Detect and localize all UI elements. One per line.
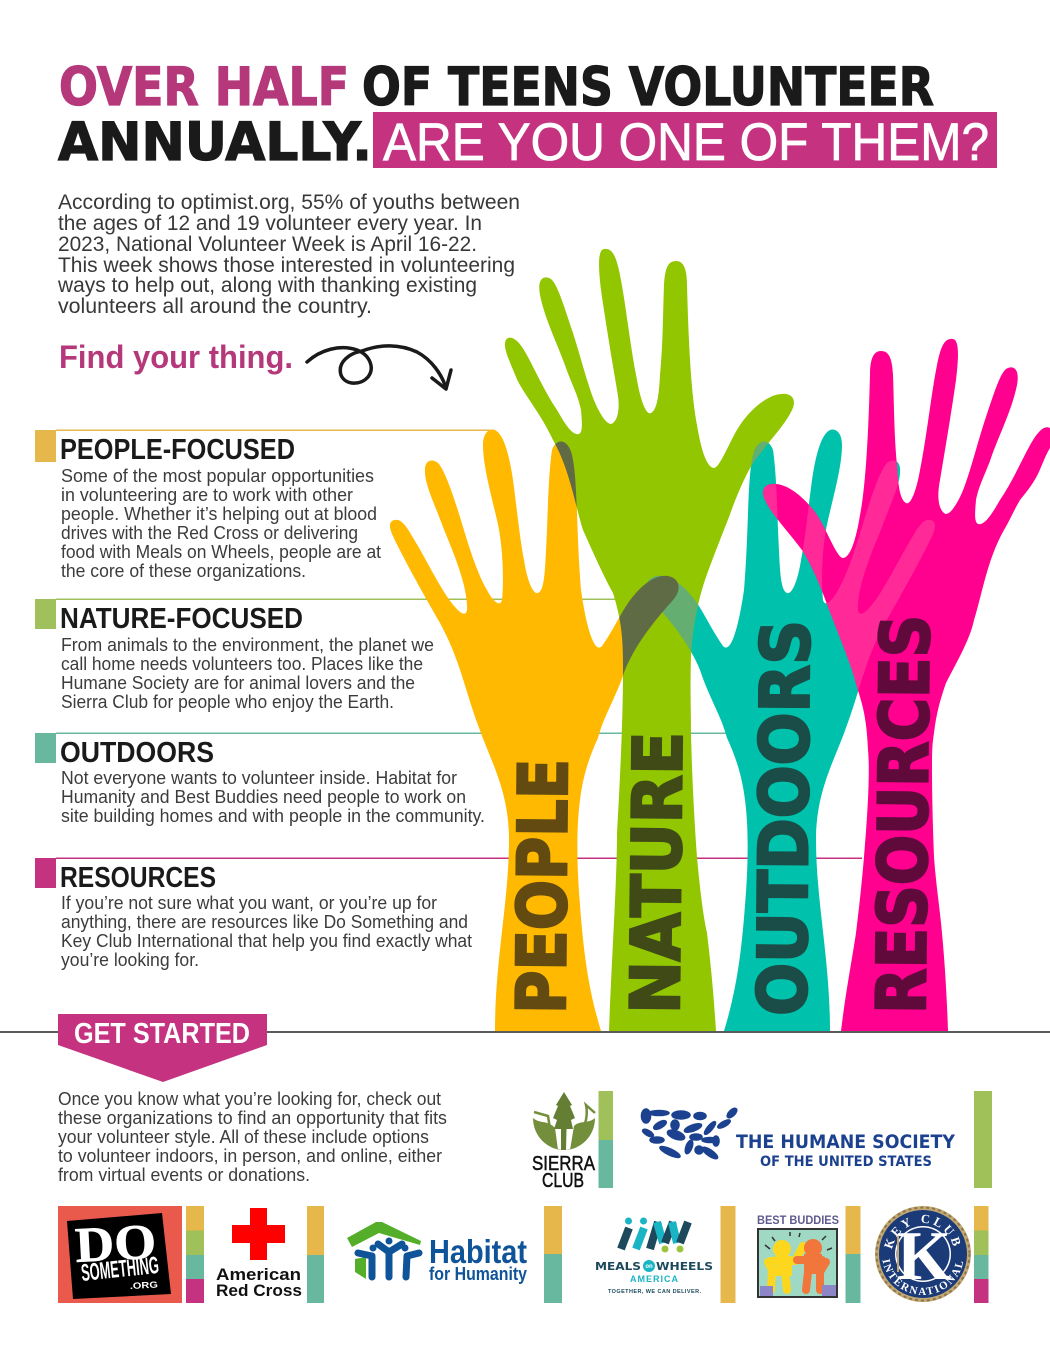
- hand: yellow people: [390, 430, 679, 1031]
- logo: habitat for humanity: Habitat: [429, 1233, 527, 1270]
- logo: american red cross: [216, 1206, 324, 1303]
- intro paragraph: volunteers all around the country.: [58, 294, 372, 318]
- logo: do something: [58, 1206, 204, 1303]
- panel: people-focused: Some of the most popular opportunities: [61, 465, 374, 486]
- panel: nature-focused: call home needs volunteers too. Places like the: [61, 653, 423, 674]
- intro paragraph: This week shows those interested in volunteering: [58, 253, 515, 277]
- panel: nature-focused: NATURE-FOCUSED: [60, 603, 303, 635]
- hand: teal outdoors: [646, 430, 935, 1031]
- panel: nature-focused: [35, 599, 434, 712]
- get started paragraph: from virtual events or donations.: [58, 1164, 310, 1185]
- logo: american red cross: Red Cross: [216, 1281, 302, 1300]
- icon: looping arrow: [307, 346, 451, 389]
- title: ANNUALLY.: [58, 112, 372, 173]
- logo: key club international: INTERNATIONAL: [882, 1258, 964, 1295]
- panel: outdoors: Humanity and Best Buddies need people to work on: [61, 786, 466, 807]
- panel: resources: RESOURCES: [60, 862, 216, 894]
- logo: meals on wheels: WHEELS: [656, 1261, 713, 1273]
- intro paragraph: [57, 190, 520, 318]
- logo: meals on wheels: AMERICA: [630, 1274, 678, 1284]
- get started paragraph: these organizations to find an opportunity that fits: [58, 1107, 447, 1128]
- hand label: resources: RESOURCES: [863, 614, 946, 1014]
- panel: outdoors: [35, 733, 485, 826]
- logo: meals on wheels: [595, 1206, 736, 1303]
- panel: outdoors: site building homes and with people in the community.: [61, 805, 485, 826]
- logo: american red cross: American: [216, 1265, 301, 1284]
- logo: do something: SOMETHING: [80, 1252, 160, 1287]
- panel: people-focused: PEOPLE-FOCUSED: [60, 434, 295, 466]
- get started banner: GET STARTED: [74, 1018, 250, 1050]
- logo: key club international: K: [897, 1218, 951, 1295]
- logo: humane society: THE HUMANE SOCIETY: [736, 1131, 955, 1153]
- hand label: nature: NATURE: [617, 731, 699, 1014]
- title: OVER HALF: [59, 57, 349, 118]
- panel: resources: anything, there are resources like Do Something and: [61, 911, 468, 932]
- logo: habitat for humanity: for Humanity: [429, 1264, 527, 1284]
- logo: meals on wheels: on: [645, 1264, 653, 1270]
- logo: key club international: [875, 1206, 988, 1303]
- overlap: teal over green: [648, 442, 768, 652]
- panel: people-focused: [35, 430, 381, 581]
- title: [58, 57, 997, 173]
- intro paragraph: ways to help out, along with thanking existing: [57, 273, 477, 297]
- panel: people-focused: in volunteering are to work with other: [61, 484, 353, 505]
- logo: meals on wheels: TOGETHER, WE CAN DELIVER.: [608, 1289, 701, 1295]
- panel: people-focused: food with Meals on Wheels, people are at: [61, 541, 381, 562]
- get started paragraph: to volunteer indoors, in person, and online, either: [58, 1145, 442, 1166]
- panel: resources: Key Club International that help you find exactly what: [61, 930, 472, 951]
- get started paragraph: Once you know what you’re looking for, check out: [58, 1088, 441, 1109]
- panel: nature-focused: Sierra Club for people who enjoy the Earth.: [61, 691, 394, 712]
- get started paragraph: [58, 1088, 447, 1185]
- panel: people-focused: the core of these organizations.: [61, 560, 306, 581]
- panel: outdoors: Not everyone wants to volunteer inside. Habitat for: [61, 767, 457, 788]
- logo: key club international: KEY CLUB: [884, 1214, 960, 1250]
- section divider lines: [56, 430, 862, 859]
- panel: outdoors: OUTDOORS: [60, 737, 214, 769]
- title: ARE YOU ONE OF THEM?: [383, 113, 989, 172]
- get started paragraph: your volunteer style. All of these include options: [58, 1126, 429, 1147]
- raised hands illustration: [390, 249, 1050, 1031]
- intro paragraph: the ages of 12 and 19 volunteer every year. In: [58, 211, 482, 235]
- logo: best buddies: [757, 1206, 860, 1303]
- panel: resources: you’re looking for.: [61, 949, 199, 970]
- logo: sierra club: CLUB: [542, 1170, 584, 1192]
- overlap: teal under pink: [763, 460, 935, 692]
- get started banner: [58, 1014, 267, 1082]
- panel: people-focused: drives with the Red Cross or delivering: [61, 522, 358, 543]
- logo: best buddies: BEST BUDDIES: [757, 1213, 839, 1227]
- horizontal rule: [0, 1031, 1050, 1033]
- logo: sierra club: [532, 1091, 613, 1192]
- panel: resources: [35, 858, 472, 970]
- intro paragraph: 2023, National Volunteer Week is April 16-22.: [58, 232, 477, 256]
- hand: green nature: [505, 249, 794, 1031]
- overlap: yellow over green: [555, 442, 679, 676]
- intro paragraph: According to optimist.org, 55% of youths between: [58, 190, 520, 214]
- panel: nature-focused: From animals to the environment, the planet we: [61, 634, 434, 655]
- logo: habitat for humanity: [347, 1206, 562, 1303]
- panel: people-focused: people. Whether it’s helping out at blood: [61, 503, 377, 524]
- hand label: outdoors: OUTDOORS: [744, 619, 826, 1016]
- logo: do something: DO: [74, 1213, 157, 1273]
- logo: humane society: OF THE UNITED STATES: [760, 1154, 932, 1170]
- logo: humane society: [642, 1091, 992, 1188]
- hand label: people: PEOPLE: [503, 758, 584, 1014]
- find your thing heading: Find your thing.: [59, 339, 293, 375]
- hand: pink resources: [763, 339, 1050, 1031]
- logo: meals on wheels: MEALS: [595, 1261, 641, 1273]
- panel: resources: If you’re not sure what you want, or you’re up for: [61, 892, 437, 913]
- panel: nature-focused: Humane Society are for animal lovers and the: [61, 672, 415, 693]
- logo: sierra club: SIERRA: [532, 1153, 596, 1175]
- logo: do something: .ORG: [130, 1280, 158, 1291]
- title: OF TEENS VOLUNTEER: [362, 57, 934, 118]
